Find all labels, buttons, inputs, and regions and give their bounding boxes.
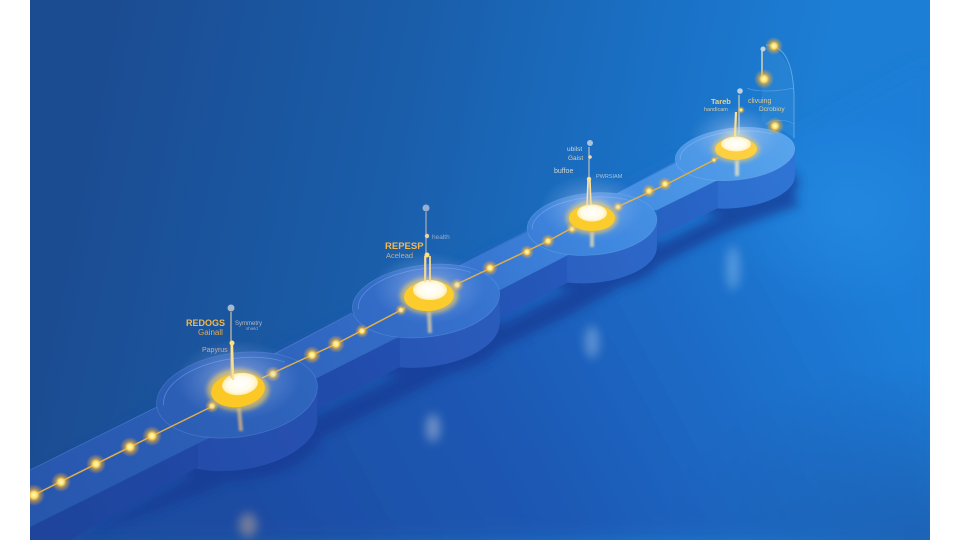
timeline platform xyxy=(23,122,797,540)
milestone 1 xyxy=(184,304,291,415)
milestone 2 xyxy=(382,204,476,318)
labels 1 xyxy=(186,318,262,354)
labels 1: Gainall xyxy=(198,328,223,337)
labels 4: Dcrobioy xyxy=(759,106,785,113)
labels 4: Tareb xyxy=(711,97,731,106)
labels 2: REPESP xyxy=(385,241,424,252)
marker ring 3 xyxy=(547,178,637,238)
light beads xyxy=(23,156,718,506)
floor reflections xyxy=(239,246,740,537)
disc 1 top xyxy=(156,352,318,438)
labels 4: clivuing xyxy=(748,98,771,105)
labels 1: shield xyxy=(246,326,258,331)
labels 3: ubilst xyxy=(567,146,582,153)
marker ring 4 xyxy=(696,110,772,165)
track side faces xyxy=(30,180,718,540)
labels 1: Papyrus xyxy=(202,347,228,354)
labels 2: Acelead xyxy=(386,251,413,260)
disc 2 top xyxy=(352,264,500,338)
labels 1: Symmetry xyxy=(235,321,262,327)
labels 4 xyxy=(704,97,785,113)
pin 2 xyxy=(422,204,430,282)
labels 3: buffoe xyxy=(554,168,573,175)
track shadow on floor xyxy=(132,168,803,515)
labels 2 xyxy=(386,234,450,258)
labels 2: health xyxy=(432,234,450,241)
disc 3 top xyxy=(526,192,658,256)
marker ring 2 xyxy=(382,256,476,318)
end arch with lights xyxy=(747,37,794,138)
milestone 4 xyxy=(690,88,785,166)
disc 4 top xyxy=(674,127,796,181)
track top surfaces xyxy=(30,162,718,527)
milestone 3 xyxy=(547,140,637,238)
track upper edge highlight xyxy=(30,162,675,470)
labels 1: REDOGS xyxy=(186,318,225,328)
disc light streaks xyxy=(239,160,737,431)
pin 3 xyxy=(587,140,593,205)
labels 3 xyxy=(554,146,623,180)
labels 4: handicam xyxy=(704,107,728,113)
labels 3: Gaist xyxy=(568,155,583,162)
glowing path line xyxy=(30,158,718,497)
pin 4 xyxy=(735,88,745,136)
pin 1 xyxy=(228,304,234,380)
disc side walls xyxy=(151,148,797,481)
marker ring 1 xyxy=(184,345,291,415)
labels 3: PWRSIAM xyxy=(596,174,623,180)
